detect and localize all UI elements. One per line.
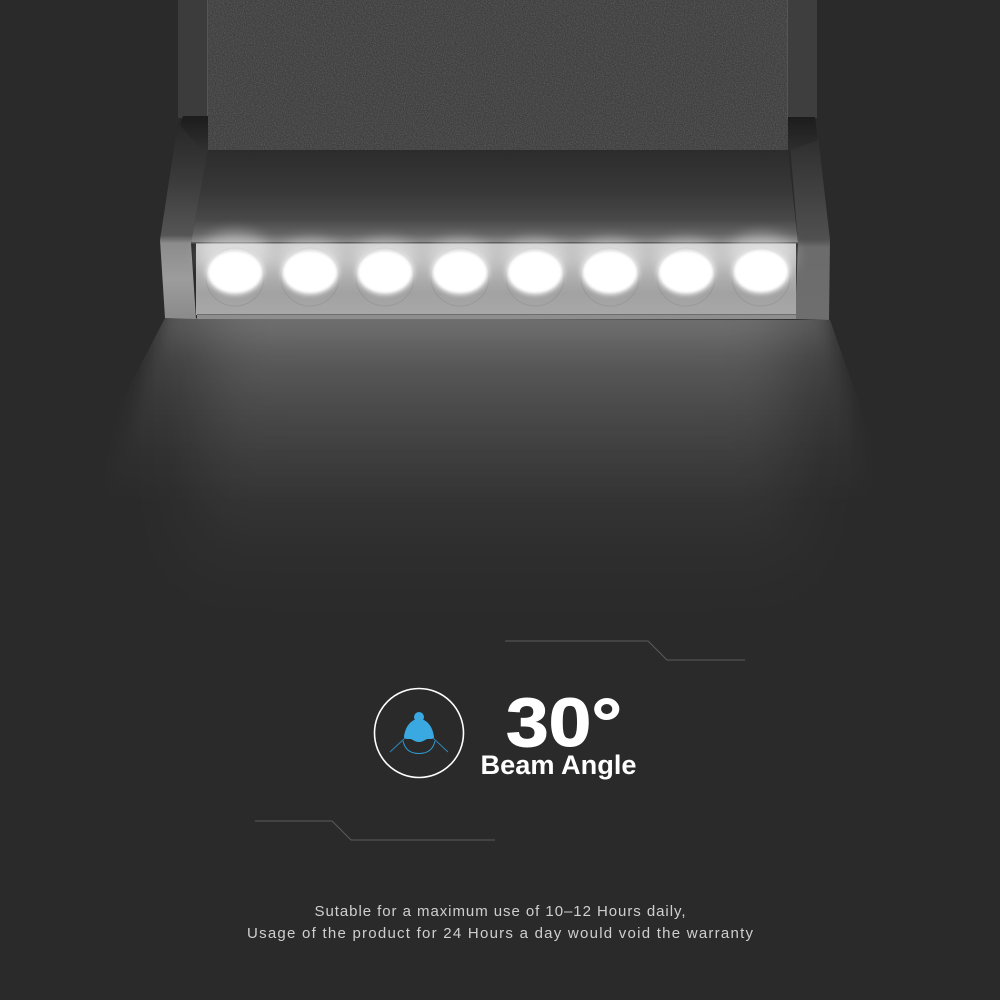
fixture front panel <box>191 242 798 319</box>
disclaimer line 2: Usage of the product for 24 Hours a day would void the warranty <box>247 925 754 942</box>
icon: beam angle lamp in circle <box>374 688 464 778</box>
light beam <box>140 318 847 508</box>
product illustration: LED track light with beam <box>140 0 847 941</box>
LED lenses <box>199 232 795 306</box>
left end cap <box>160 117 208 319</box>
mounting block <box>207 0 788 150</box>
fixture top face <box>191 150 798 243</box>
notches beside block <box>180 116 818 150</box>
mounting block side strips <box>178 0 817 118</box>
decorative circuit lines <box>255 641 745 840</box>
right end cap <box>788 118 830 320</box>
heading: 30 degrees: 30° <box>506 684 622 761</box>
disclaimer line 1: Sutable for a maximum use of 10–12 Hours daily, <box>314 903 686 920</box>
subheading: beam angle: Beam Angle <box>480 750 636 780</box>
